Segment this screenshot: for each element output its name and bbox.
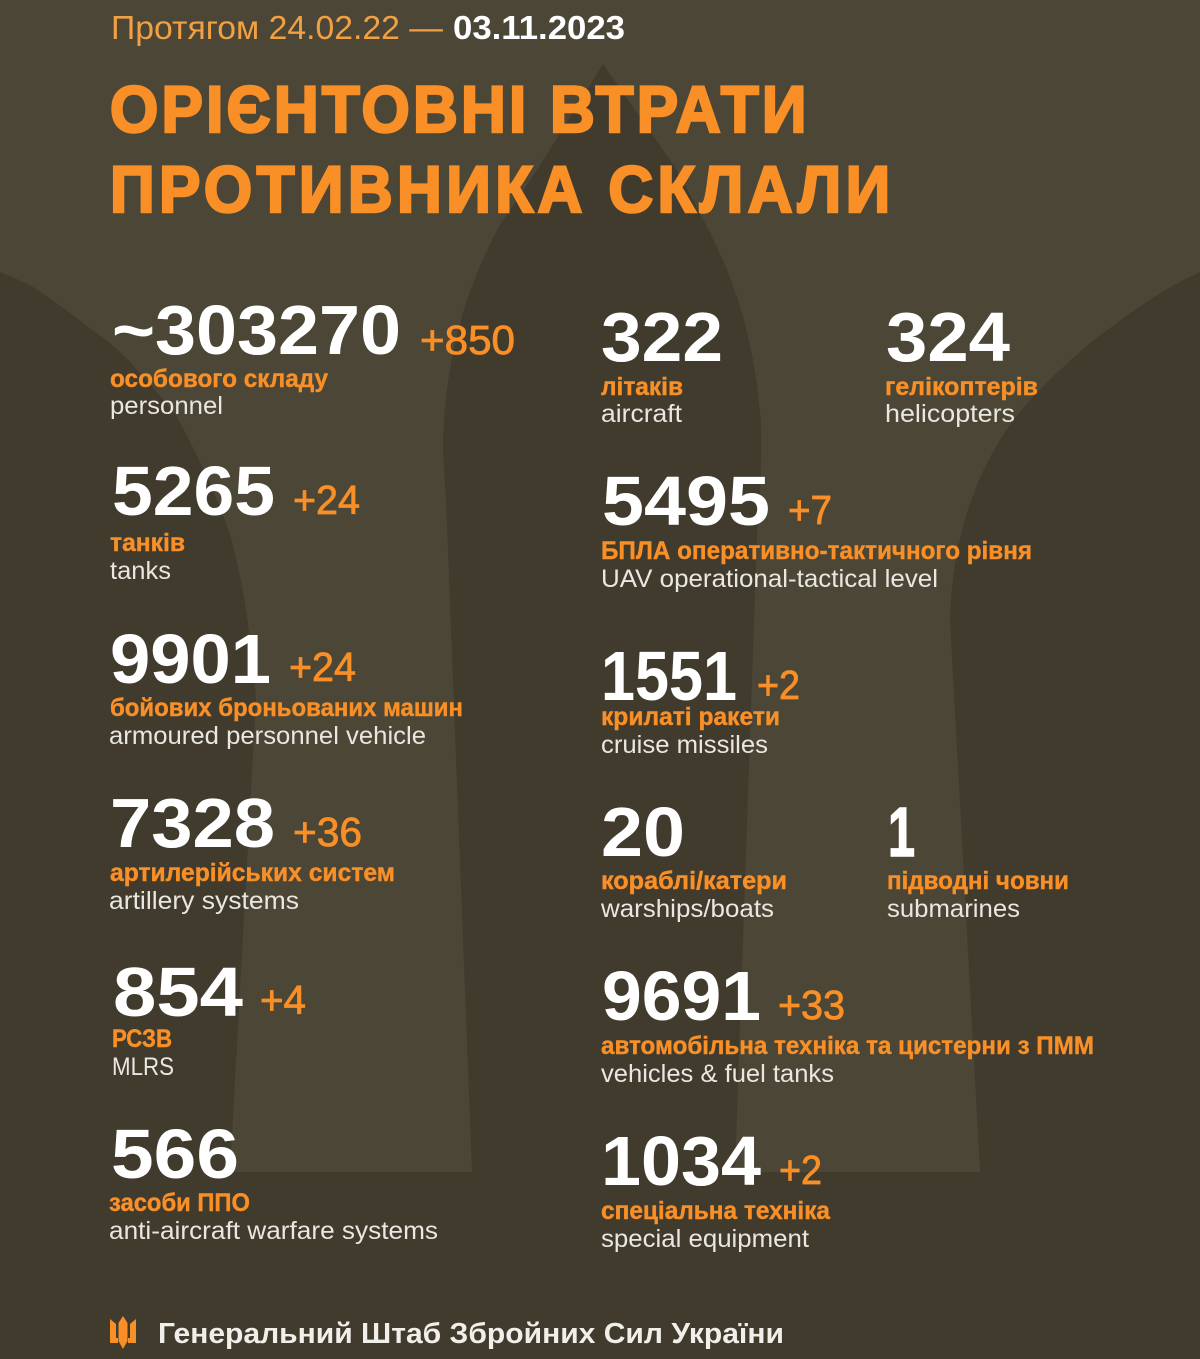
stat: warships [600, 793, 787, 923]
stat: warships: warships/boats [600, 895, 774, 923]
stat: submarines: підводні човни [887, 867, 1069, 895]
stat: aircraft: aircraft [601, 400, 682, 428]
stat: aircraft [601, 298, 723, 428]
stat: special equipment: спеціальна техніка [601, 1197, 831, 1225]
stat: artillery [109, 784, 395, 915]
date line [111, 9, 625, 46]
stat: MLRS: РСЗВ [112, 1025, 172, 1053]
stat: vehicles and fuel tanks: vehicles & fuel tanks [601, 1060, 834, 1088]
title: ОРІЄНТОВНІ ВТРАТИ [110, 72, 807, 146]
stat: artillery: +36 [293, 809, 362, 855]
stat: armoured personnel vehicles: armoured personnel vehicle [109, 722, 426, 750]
stat: UAV: +7 [788, 487, 832, 533]
stat: personnel: +850 [420, 317, 515, 363]
stat: cruise missiles: +2 [757, 662, 800, 708]
stat: armoured personnel vehicles: 9901 [110, 620, 271, 698]
icon: trident [110, 1316, 136, 1349]
stat: UAV: 5495 [602, 462, 770, 540]
title: ПРОТИВНИКА СКЛАЛИ [110, 152, 890, 226]
stat: tanks: +24 [293, 477, 360, 523]
stat: special equipment: 1034 [601, 1122, 761, 1200]
stat: helicopters: helicopters [885, 400, 1015, 428]
stat: cruise missiles [601, 637, 800, 759]
stat: cruise missiles: 1551 [601, 637, 737, 715]
stat: personnel: особового складу [110, 365, 328, 393]
stat: armoured personnel vehicles [109, 620, 463, 750]
stat: vehicles and fuel tanks: 9691 [602, 957, 761, 1035]
stat: submarines [887, 793, 1069, 923]
stat: MLRS: +4 [260, 977, 306, 1023]
footer: General Staff: Генеральний Штаб Збройних Сил України [158, 1318, 784, 1350]
stat: vehicles and fuel tanks: автомобільна техніка та цистерни з ПММ [601, 1032, 1094, 1060]
stat: MLRS: MLRS [112, 1053, 174, 1081]
stat: UAV: БПЛА оперативно-тактичного рівня [601, 537, 1032, 565]
date line: Протягом 24.02.22 — [111, 9, 443, 46]
stat: submarines: submarines [887, 895, 1020, 923]
stat: anti-aircraft: 566 [111, 1115, 239, 1193]
stat: personnel: ~303270 [112, 291, 401, 369]
stat: cruise missiles: крилаті ракети [601, 703, 780, 731]
stat: armoured personnel vehicles: +24 [289, 644, 356, 690]
stat: special equipment [601, 1122, 831, 1253]
stat: MLRS [112, 953, 306, 1081]
stat: tanks: tanks [110, 557, 171, 585]
stat: tanks: танків [110, 529, 185, 557]
stat: submarines: 1 [888, 793, 915, 871]
title [110, 72, 890, 226]
stat: artillery: артилерійських систем [110, 859, 395, 887]
stat: vehicles and fuel tanks: +33 [778, 982, 845, 1028]
stat: artillery: 7328 [110, 784, 275, 862]
stat: anti-aircraft [109, 1115, 438, 1245]
stat: helicopters: 324 [886, 298, 1010, 376]
stat: tanks: 5265 [112, 452, 275, 530]
stat: helicopters: гелікоптерів [885, 373, 1038, 401]
stat: personnel [110, 291, 515, 420]
stat: aircraft: 322 [601, 298, 723, 376]
stat: anti-aircraft: засоби ППО [109, 1189, 250, 1217]
stat: MLRS: 854 [113, 953, 243, 1031]
stat: special equipment: special equipment [601, 1225, 809, 1253]
stat: armoured personnel vehicles: бойових броньованих машин [110, 694, 463, 722]
date line: 03.11.2023 [453, 9, 625, 46]
stat: artillery: artillery systems [109, 887, 299, 915]
stat: vehicles and fuel tanks [601, 957, 1094, 1088]
stat: cruise missiles: cruise missiles [601, 731, 768, 759]
stat: UAV: UAV operational-tactical level [601, 565, 938, 593]
stat: helicopters [885, 298, 1038, 428]
stat: personnel: personnel [110, 392, 223, 420]
stat: special equipment: +2 [779, 1147, 822, 1193]
stat: warships: 20 [601, 793, 685, 871]
stat: warships: кораблі/катери [601, 867, 787, 895]
stat: UAV [601, 462, 1032, 593]
stat: aircraft: літаків [601, 373, 683, 401]
stat: tanks [110, 452, 360, 585]
stat: anti-aircraft: anti-aircraft warfare systems [109, 1217, 438, 1245]
